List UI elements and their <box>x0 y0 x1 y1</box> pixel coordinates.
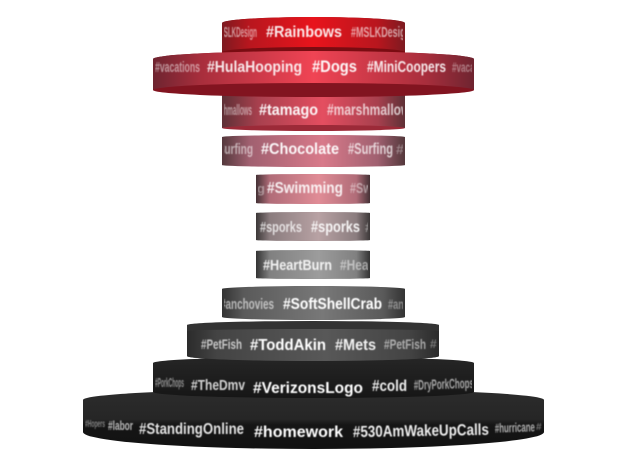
disc 11: bottom black tier: #530AmWakeUpCalls <box>353 422 489 441</box>
disc 7: grey tier: #HeartBurn <box>340 257 405 274</box>
disc 3: rose-red tier <box>222 96 405 131</box>
disc 4: dusty rose tier: # <box>396 141 404 157</box>
disc 8: mid grey tier: #anchovies <box>388 296 438 312</box>
disc 10: black tier: #VerizonsLogo <box>253 380 363 397</box>
disc 5: pink tier: #Swimming <box>350 180 410 197</box>
stacked discs infographic <box>83 17 544 449</box>
disc 2: wide bright red tier: #vacations <box>452 59 494 75</box>
disc 7: grey tier: #HeartBurn <box>263 257 332 274</box>
disc 2: wide bright red tier: #Dogs <box>312 58 357 76</box>
disc 3: rose-red tier: #marshmallows <box>205 102 252 119</box>
disc 8: mid grey tier: #anchovies <box>220 296 274 313</box>
disc 2: wide bright red tier <box>153 51 494 97</box>
disc 6: grey-pink tier <box>256 212 373 241</box>
disc 5: pink tier: #Swimming <box>267 180 343 197</box>
disc 4: dusty rose tier <box>212 135 405 167</box>
disc 11: bottom black tier: #homework <box>254 424 343 441</box>
disc 6: grey-pink tier: # <box>365 219 373 235</box>
disc 9: dark grey tier: #PetFish <box>201 336 242 352</box>
disc 11: bottom black tier: #labor <box>108 418 133 433</box>
disc 11: bottom black tier: #StandingOnline <box>139 421 244 438</box>
disc 4: dusty rose tier: #Surfing <box>212 141 253 158</box>
disc 5: pink tier <box>256 174 370 204</box>
disc 11: bottom black tier: # <box>536 422 542 433</box>
disc 4: dusty rose tier: #Surfing <box>348 141 393 158</box>
disc 5: pink tier: g <box>257 181 265 196</box>
disc 6: grey-pink tier: #sporks <box>260 219 302 236</box>
disc 4: dusty rose tier: #Chocolate <box>261 141 339 158</box>
disc 9: dark grey tier: # <box>430 337 437 351</box>
disc 9: dark grey tier: #Mets <box>335 337 376 354</box>
disc 10: black tier <box>153 357 474 398</box>
disc 7: grey tier <box>256 250 370 279</box>
disc 6: grey-pink tier: #sporks <box>311 219 360 236</box>
disc 9: dark grey tier: #PetFish <box>384 336 426 352</box>
disc 10: black tier: #TheDmv <box>191 378 245 394</box>
disc 1: top red tier: #MSLKDesign <box>351 24 411 41</box>
disc 8: mid grey tier: #SoftShellCrab <box>283 296 382 313</box>
disc 2: wide bright red tier: #HulaHooping <box>207 59 302 76</box>
disc 1: top red tier <box>215 17 411 53</box>
disc 3: rose-red tier: #marshmallows <box>327 102 417 119</box>
disc 1: top red tier: #Rainbows <box>266 24 342 41</box>
disc 8: mid grey tier <box>222 286 405 320</box>
disc 2: wide bright red tier: #MiniCoopers <box>367 59 446 76</box>
disc 10: black tier: #cold <box>372 378 407 395</box>
disc 2: wide bright red tier: #vacations <box>155 60 200 76</box>
disc 11: bottom black tier: #Hopers <box>85 419 105 430</box>
disc 9: dark grey tier: #ToddAkin <box>250 337 326 354</box>
disc 11: bottom black tier: #hurricane <box>495 419 535 436</box>
disc 1: top red tier: #MSLKDesign <box>215 24 257 41</box>
disc 10: black tier: #PorkChops <box>155 375 184 390</box>
disc 3: rose-red tier: #tamago <box>259 102 318 119</box>
disc 11: bottom black tier <box>83 389 544 449</box>
disc 9: dark grey tier <box>187 321 439 361</box>
disc 10: black tier: #DryPorkChops <box>414 375 474 393</box>
